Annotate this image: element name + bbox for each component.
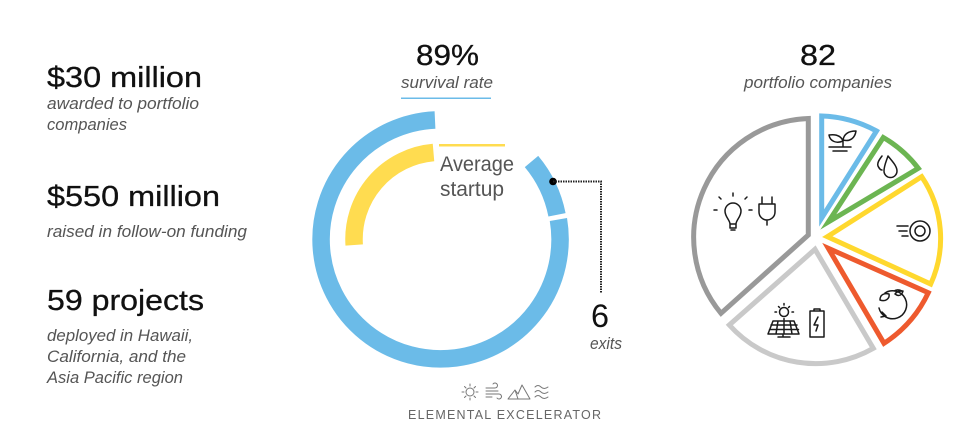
stat: 6 exits xyxy=(590,298,622,353)
heading: 82 portfolio companies: 82 xyxy=(800,40,836,72)
slice: circular economy xyxy=(828,248,928,343)
slice: solar and storage xyxy=(729,249,873,364)
heading: 89% survival rate xyxy=(401,40,493,99)
stat: 59 projects deployed: Asia Pacific region xyxy=(46,369,183,387)
donut chart: survival rate xyxy=(321,120,560,359)
logo: Elemental Excelerator xyxy=(408,383,601,422)
stat: 59 projects deployed xyxy=(46,285,204,387)
stat: $30 million awarded: $30 million xyxy=(47,62,202,94)
callout: exits leader line xyxy=(549,178,601,293)
stat: $30 million awarded: awarded to portfolio xyxy=(47,95,199,113)
label: average startup: startup xyxy=(440,178,504,201)
stat: $30 million awarded: companies xyxy=(47,116,127,134)
pie chart: portfolio sectors xyxy=(694,116,941,364)
slice: energy xyxy=(694,118,808,313)
blue ring: survivors xyxy=(321,120,560,359)
icon: water xyxy=(535,386,548,398)
icon: mountains xyxy=(508,385,530,399)
blue ring segment: exits xyxy=(532,162,557,215)
icon: sun xyxy=(462,384,478,400)
stat: $550 million raised xyxy=(47,181,248,241)
heading: 82 portfolio companies xyxy=(743,40,892,92)
label: average startup xyxy=(439,144,514,201)
logo: Elemental Excelerator: ELEMENTAL EXCELERATOR xyxy=(408,408,601,422)
stat: $30 million awarded xyxy=(47,62,202,134)
slice: wind energy xyxy=(827,177,941,284)
stat: $550 million raised: raised in follow-on funding xyxy=(47,223,248,241)
yellow arc: average startup xyxy=(354,152,434,245)
stat: 6 exits: exits xyxy=(590,335,622,353)
stat: 59 projects deployed: deployed in Hawaii, xyxy=(47,327,193,345)
icon: wind xyxy=(486,383,502,399)
stat: $550 million raised: $550 million xyxy=(47,181,220,213)
heading: 89% survival rate: survival rate xyxy=(401,74,493,92)
slice: water xyxy=(828,138,918,222)
stat: 59 projects deployed: 59 projects xyxy=(47,285,204,317)
heading: 89% survival rate: 89% xyxy=(416,40,479,72)
stat: 6 exits: 6 xyxy=(591,298,609,334)
slice: agriculture xyxy=(822,116,876,218)
label: average startup: Average xyxy=(440,153,514,176)
heading: 82 portfolio companies: portfolio companies xyxy=(743,74,892,92)
stat: 59 projects deployed: California, and the xyxy=(47,348,186,366)
